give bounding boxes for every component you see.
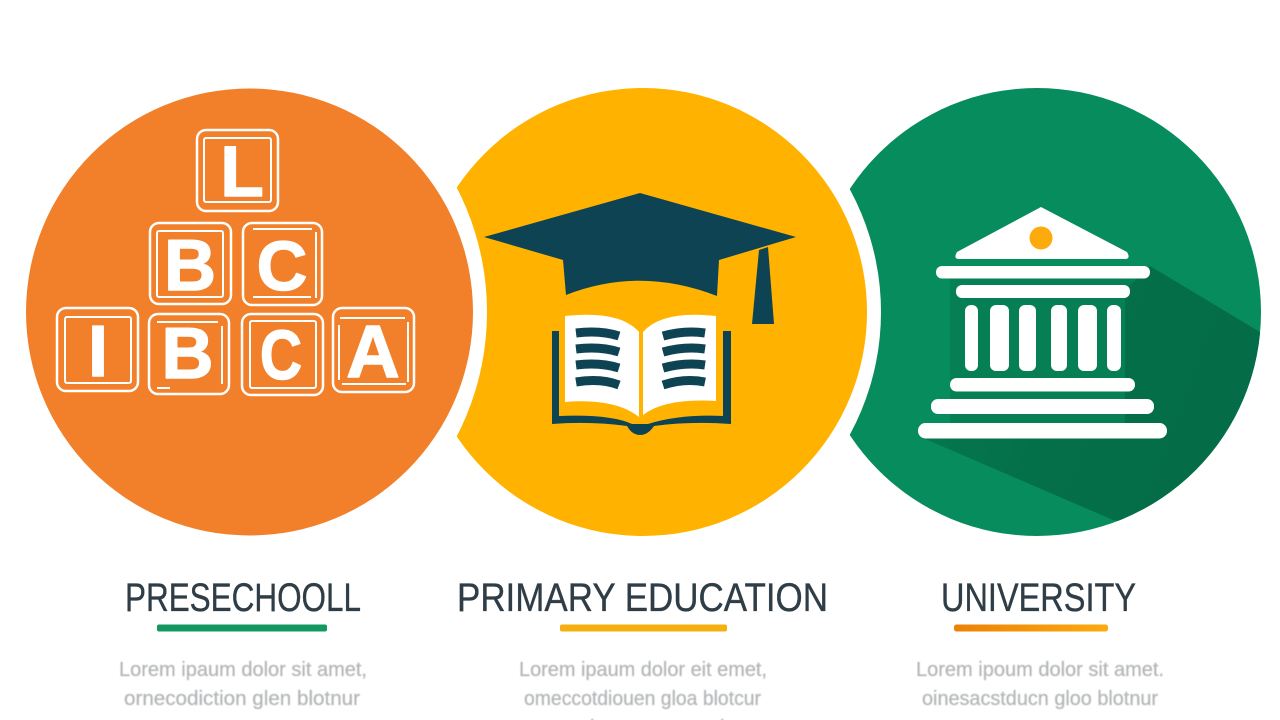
column: primary education caption (457, 576, 828, 720)
icon: alphabet blocks (57, 130, 414, 395)
text block: university description: Lorem ipoum dolor sit amet. (916, 659, 1164, 681)
text block: preschool description: ornecodiction glen blotnur (124, 688, 360, 710)
text block: primary education description: Lorem ipaum dolor eit emet, (519, 659, 767, 681)
text block: primary education description: omeccotdiouen gloa blotcur (524, 688, 761, 710)
icon: open book (552, 315, 731, 435)
underline: green (157, 624, 327, 632)
text block: preschool description (119, 659, 367, 710)
icon: graduation cap (484, 193, 796, 324)
block A (333, 308, 414, 393)
block I (57, 308, 138, 392)
block B lower: B (162, 314, 214, 394)
panel: university circle (850, 88, 1261, 536)
soft shadow behind columns (950, 272, 1135, 432)
column: university caption (916, 576, 1164, 710)
block I: I (88, 312, 108, 392)
block B upper: B (164, 226, 216, 306)
heading: primary education: PRIMARY EDUCATION (457, 576, 828, 620)
long shadow (924, 266, 1260, 521)
block L (197, 130, 278, 212)
column: preschool caption (119, 576, 367, 710)
heading: university: UNIVERSITY (941, 576, 1136, 620)
underline: orange (954, 624, 1108, 632)
heading: preschool: PRESECHOOLL (125, 576, 361, 620)
underline: yellow (560, 624, 727, 632)
icon: university building (918, 207, 1167, 438)
panel: primary education circle (367, 55, 881, 569)
block C upper: C (257, 227, 307, 305)
text block: primary education description (519, 659, 767, 720)
block C lower (242, 314, 323, 395)
panel: preschool circle (0, 41, 487, 583)
text block: preschool description: Lorem ipaum dolor sit amet, (119, 659, 367, 681)
block L: L (220, 133, 264, 212)
block B upper (150, 223, 231, 306)
text block: university description: oinesacstducn gloo blotnur (922, 688, 1158, 710)
block B lower (149, 314, 229, 394)
block C upper (243, 223, 322, 305)
text block: university description (916, 659, 1164, 710)
block C lower: C (260, 316, 302, 394)
block A: A (346, 310, 400, 393)
